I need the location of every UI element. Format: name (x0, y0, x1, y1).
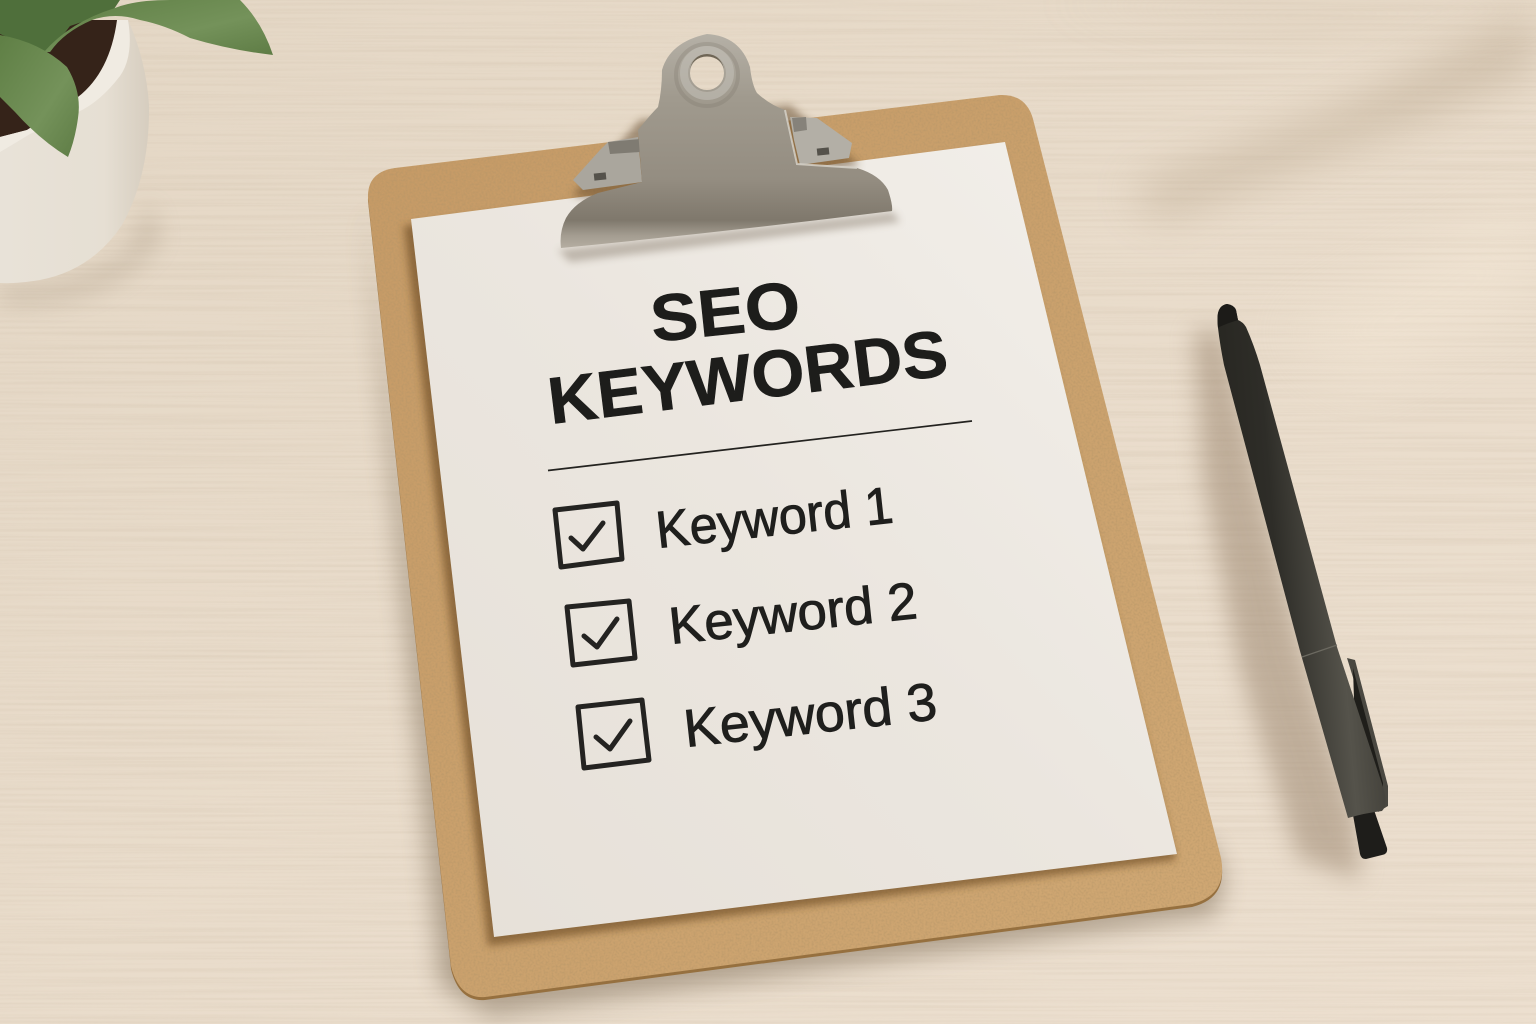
heading: KEYWORDS: KEYWORDS (544, 315, 952, 438)
left hinge (573, 137, 642, 190)
pen push button (1218, 304, 1238, 328)
clip highlight (785, 110, 857, 168)
pen barrel (1218, 304, 1386, 818)
pen clip (1347, 658, 1388, 812)
label: Keyword 1: Keyword 1 (653, 477, 896, 560)
metal bulldog clip (558, 34, 900, 262)
clip hole depth (690, 54, 724, 71)
plant pot with leaves (0, 0, 273, 303)
checklist item 1 (555, 477, 896, 567)
pen (1194, 304, 1388, 880)
heading: SEO: SEO (647, 267, 804, 356)
clipboard board (368, 95, 1222, 997)
pen shadow (1194, 330, 1360, 880)
pot rim (0, 20, 130, 152)
leaf: upper right (44, 0, 273, 55)
label: Keyword 2: Keyword 2 (666, 572, 920, 656)
clip eyelet shading (676, 44, 738, 106)
pen tip (1353, 807, 1387, 859)
checklist item 3 (578, 672, 940, 768)
checklist item 2 (567, 572, 920, 665)
clipboard shadow (364, 200, 1225, 1016)
paper shadow (404, 150, 1176, 946)
clipboard edge (368, 98, 1222, 1000)
checkbox 1 (555, 503, 622, 567)
pot (0, 20, 149, 283)
checkbox 2 (567, 601, 635, 665)
right hinge (790, 117, 852, 165)
leaf: dark back leaves (0, 0, 120, 52)
pot shadow (0, 200, 160, 303)
soil (0, 20, 117, 137)
leaf: lower left (0, 35, 79, 157)
clipboard (360, 90, 1230, 1016)
paper sheet (411, 142, 1177, 937)
clip shadow (558, 212, 900, 262)
clip body (561, 34, 892, 248)
checkbox 3 (578, 700, 649, 768)
label: Keyword 3: Keyword 3 (681, 672, 940, 759)
clip eyelet ring (684, 50, 730, 96)
board texture (360, 90, 1230, 1005)
